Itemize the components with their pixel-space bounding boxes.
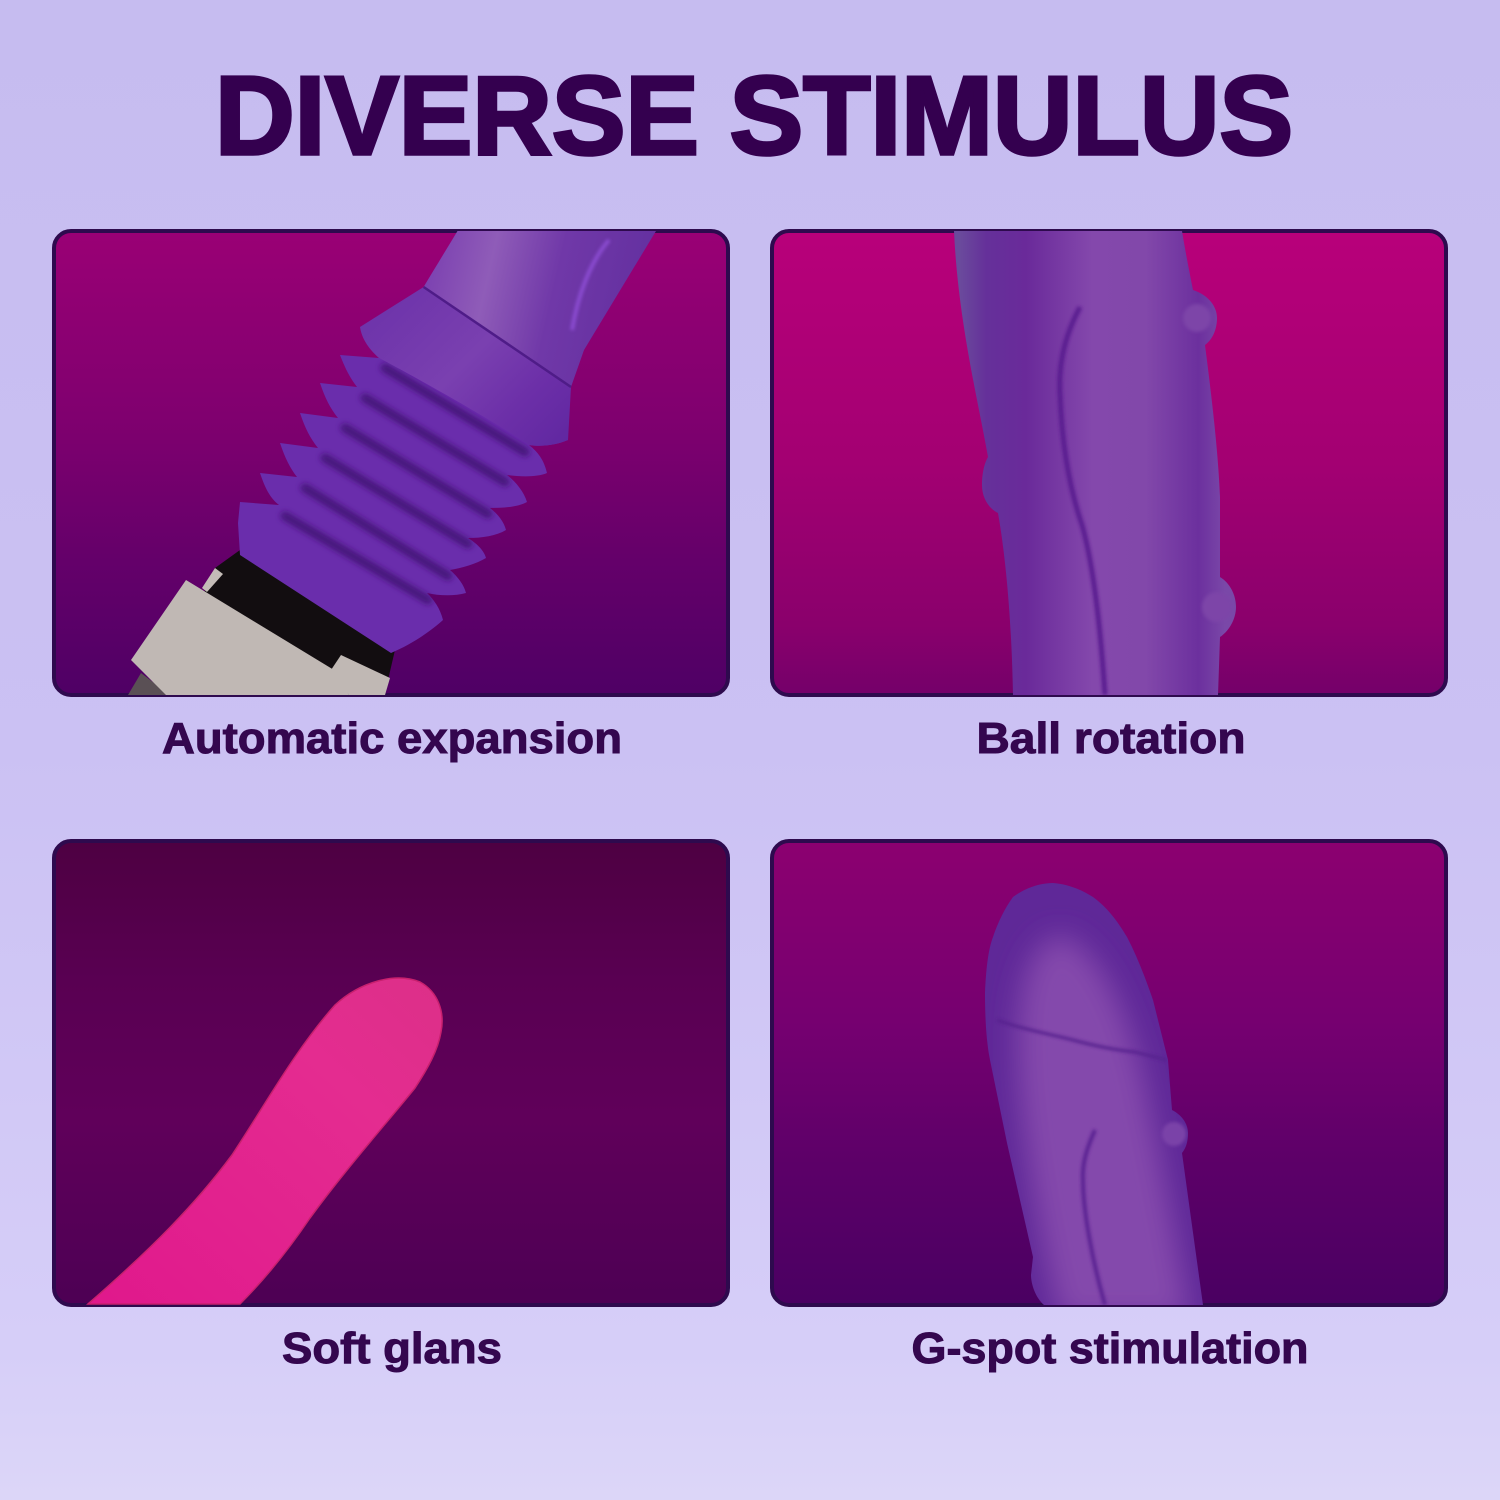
panel: soft glans bbox=[54, 841, 728, 1305]
icon: pink tip bbox=[88, 978, 442, 1304]
title: DIVERSE STIMULUS bbox=[215, 54, 1293, 178]
icon: metal mount bbox=[128, 568, 390, 695]
panel: automatic expansion bbox=[54, 231, 728, 695]
label: automatic expansion: Automatic expansion bbox=[162, 714, 622, 763]
panel: g-spot stimulation bbox=[772, 841, 1446, 1320]
label: g-spot stimulation: G-spot stimulation bbox=[912, 1324, 1308, 1373]
icon: upper collar and tube bbox=[360, 231, 656, 446]
label: soft glans: Soft glans bbox=[282, 1324, 502, 1373]
icon: ribbed bellows bbox=[238, 355, 568, 653]
label: ball rotation: Ball rotation bbox=[976, 714, 1246, 763]
icon: shaft with beads bbox=[954, 231, 1236, 695]
icon: curved tip with beads bbox=[985, 883, 1203, 1305]
icon: black cylinder bbox=[204, 550, 395, 680]
panel: ball rotation bbox=[772, 231, 1446, 695]
